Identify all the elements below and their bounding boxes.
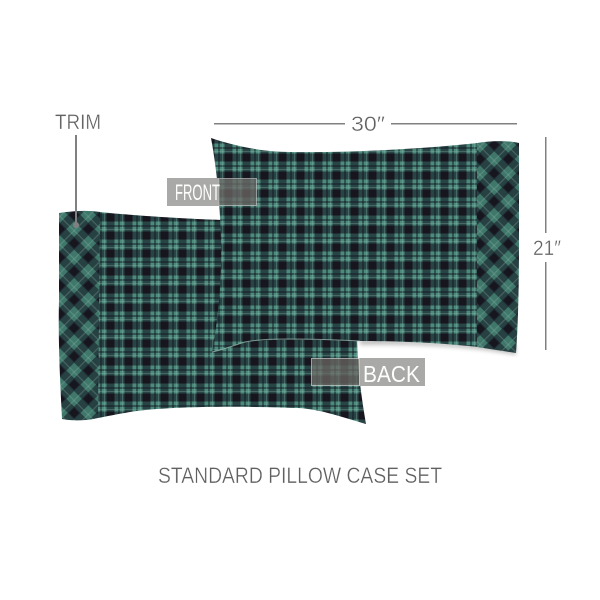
trim label: TRIM — [55, 111, 101, 134]
front pillow case — [211, 138, 519, 353]
back label — [312, 358, 425, 387]
back label: BACK — [363, 361, 421, 387]
trim leader line — [73, 135, 79, 228]
back pillow case — [59, 211, 366, 424]
front pillow body — [211, 138, 478, 352]
front pillow bottom seam highlight — [212, 339, 360, 352]
back pillow body — [98, 212, 366, 424]
height dimension: 21″ — [533, 237, 562, 260]
front pillow shadow — [360, 338, 516, 355]
front label: FRONT — [175, 180, 220, 205]
width dimension: 30″ — [351, 113, 386, 136]
back pillow trim cuff — [59, 211, 100, 420]
front pillow trim cuff — [477, 141, 519, 353]
caption: STANDARD PILLOW CASE SET — [158, 463, 442, 488]
